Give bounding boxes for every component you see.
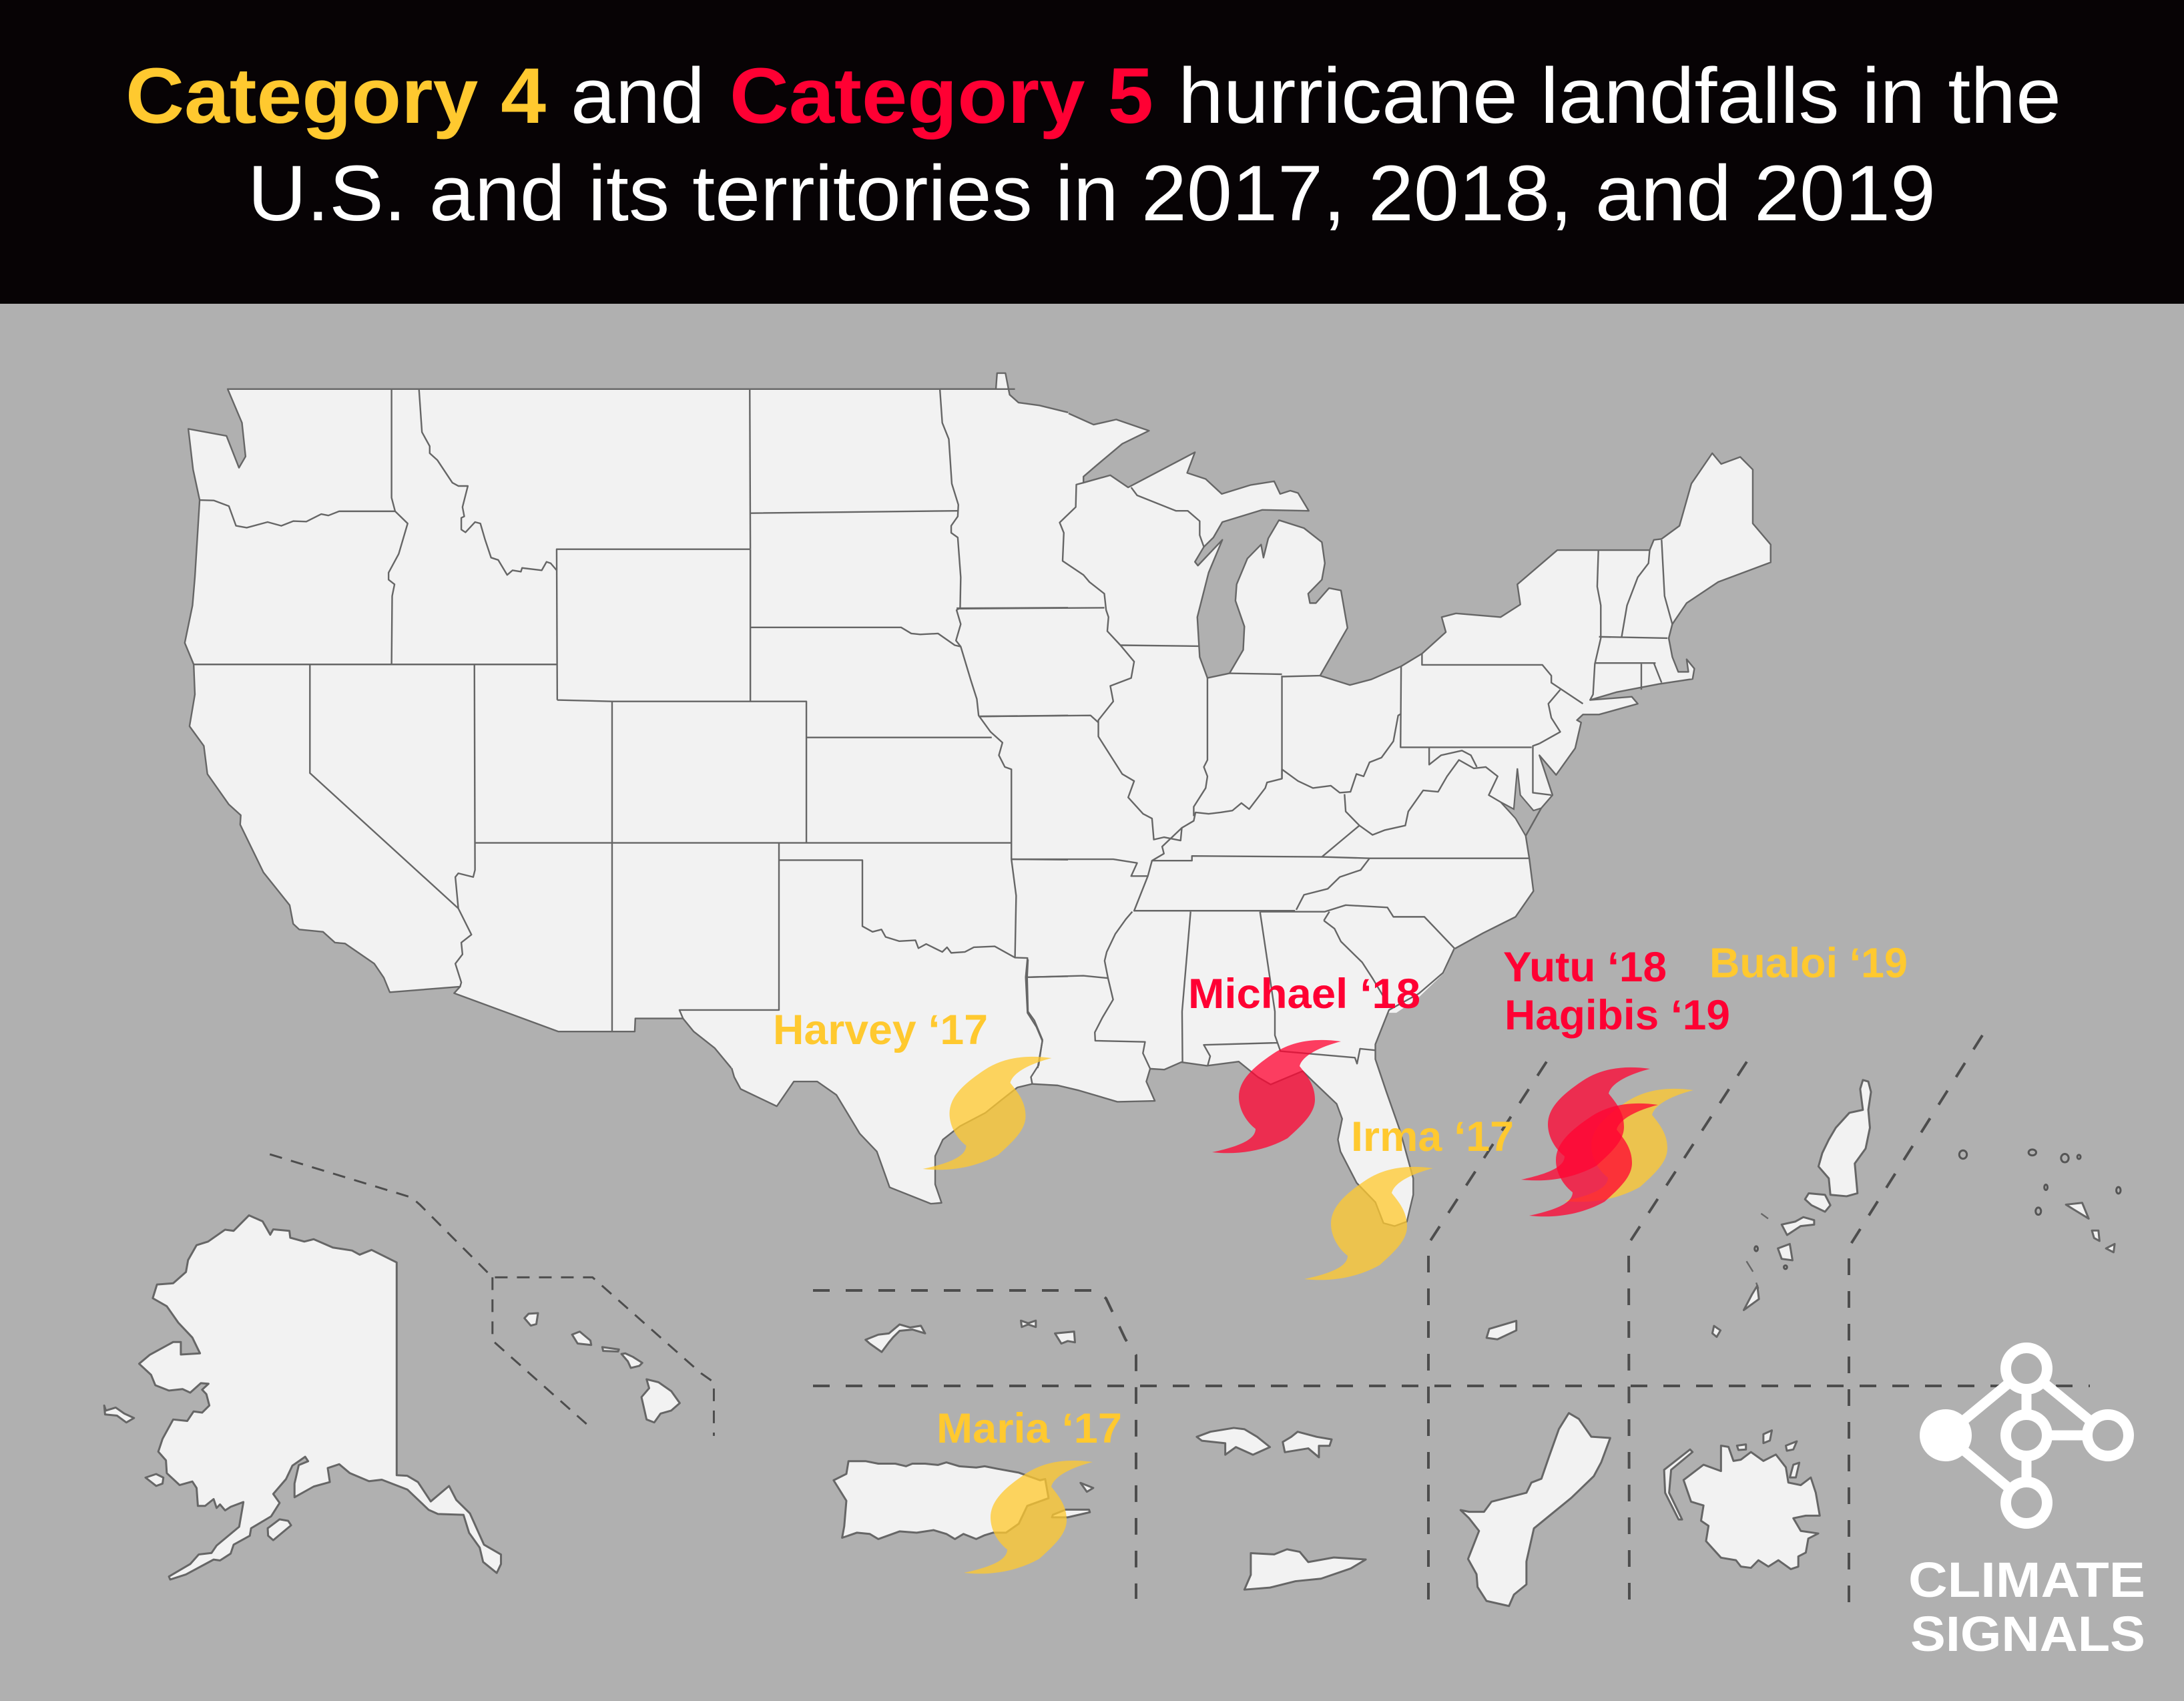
hurricane: Harvey [922, 1057, 1052, 1170]
label: Harvey: Harvey ‘17 [773, 1007, 988, 1053]
map: U.S. Virgin Islands [1197, 1428, 1366, 1590]
logo: Climate Signals: CLIMATE [1908, 1552, 2145, 1608]
label: Maria: Maria ‘17 [936, 1405, 1122, 1452]
western state lines [185, 373, 1068, 1068]
label: Hagibis: Hagibis ‘19 [1505, 992, 1730, 1039]
hurricanes: Bualoi, Yutu and Hagibis [1521, 1067, 1693, 1216]
map: Hawaii [525, 1313, 679, 1423]
label: Bualoi: Bualoi ‘19 [1709, 940, 1908, 987]
map: Alaska [104, 1216, 501, 1580]
map: Guam [1460, 1413, 1610, 1606]
title banner: U.S. and its territories in 2017, 2018, and 2019 [248, 150, 1936, 238]
map: Palau [1664, 1431, 1820, 1569]
title banner [0, 0, 2184, 304]
title banner: hurricane landfalls in the [1178, 52, 2061, 140]
hurricane: Irma [1304, 1167, 1433, 1280]
title banner: Category 5 [730, 52, 1153, 140]
eastern state lines [957, 413, 1771, 949]
map: Puerto Rico [834, 1461, 1093, 1539]
map: American Samoa [866, 1320, 1075, 1352]
southern state lines [732, 912, 1454, 1226]
map: contiguous United States [185, 373, 1771, 1226]
title banner: and [571, 52, 705, 140]
inset boundaries: territories [813, 1032, 2090, 1602]
logo: Climate Signals: SIGNALS [1910, 1606, 2145, 1662]
label: Irma: Irma ‘17 [1351, 1114, 1514, 1160]
title banner: Category 4 [125, 52, 546, 140]
hurricane: Maria [964, 1461, 1093, 1573]
hurricane: Michael [1212, 1040, 1341, 1153]
label: Yutu: Yutu ‘18 [1503, 944, 1667, 991]
label: Michael: Michael ‘18 [1188, 971, 1420, 1017]
logo: Climate Signals [1908, 1348, 2145, 1662]
inset boundaries: Alaska and Hawaii [270, 1154, 714, 1436]
map: Northern Mariana Islands [1486, 1080, 2121, 1339]
